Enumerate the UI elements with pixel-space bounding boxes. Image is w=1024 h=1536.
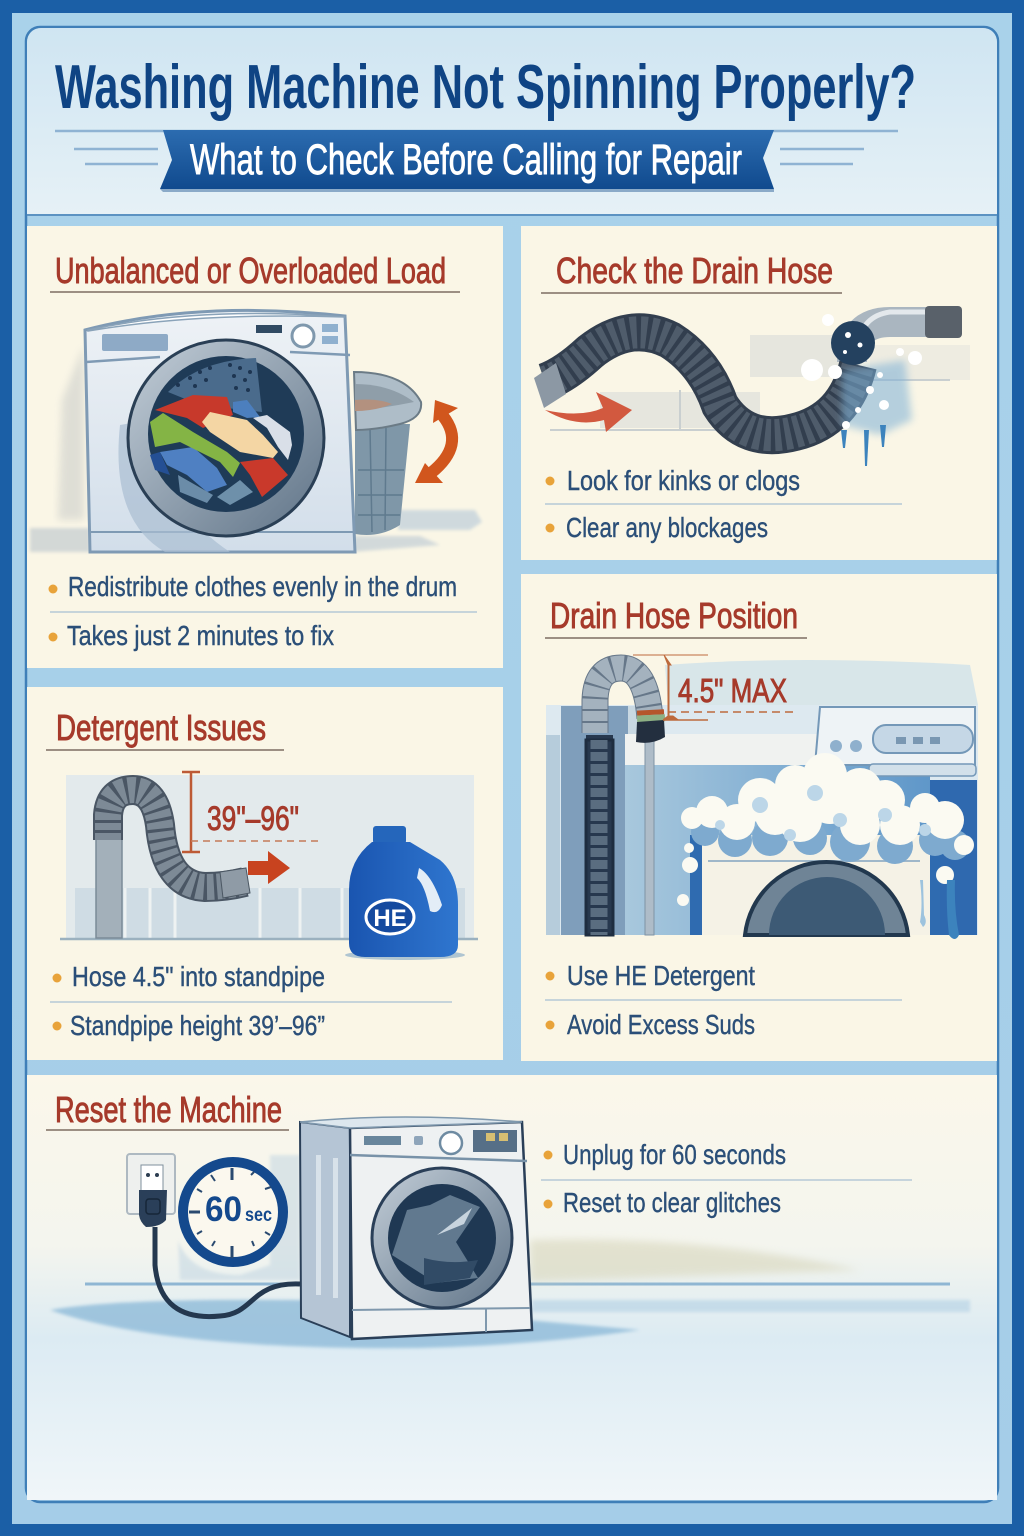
subtitle ribbon: What to Check Before Calling for Repair [190, 136, 742, 184]
measurement: 39 to 96 inches: 39"–96" [207, 800, 299, 838]
hose [108, 790, 245, 887]
bullets: Reset to clear glitches [563, 1187, 781, 1218]
header panel [27, 28, 997, 215]
washer body [85, 310, 355, 552]
backdrop [66, 775, 474, 938]
bullets: Use HE Detergent [567, 960, 755, 991]
laundry basket [354, 372, 421, 535]
suds [677, 753, 974, 939]
icon: 60 second timer [178, 1155, 300, 1280]
heading: Unbalanced or Overloaded Load [55, 250, 446, 291]
washer drum and door [128, 340, 324, 536]
icon: orange swap arrow [415, 400, 458, 483]
bullets: Hose 4.5" into standpipe [72, 961, 325, 992]
icon: 60 second timer: sec [245, 1205, 272, 1226]
bullets [545, 465, 902, 543]
icon: HE detergent bottle [345, 826, 465, 960]
panel: drain hose position [521, 574, 997, 1061]
illustration: washer with laundry and basket [30, 310, 482, 552]
metal pipe [852, 322, 930, 362]
clothes [150, 395, 292, 505]
bullets: Clear any blockages [566, 512, 768, 543]
machine control panel [815, 707, 976, 776]
heading: Reset the Machine [55, 1089, 282, 1130]
header rule lines [55, 131, 898, 164]
arrow [545, 392, 632, 432]
measurement: 4.5 inch max [633, 655, 798, 720]
floor [50, 1239, 970, 1348]
measurement: 4.5 inch max: 4.5" MAX [678, 672, 787, 709]
bullets: Redistribute clothes evenly in the drum [68, 571, 457, 602]
bullets [48, 571, 477, 651]
bullets: Unplug for 60 seconds [563, 1139, 786, 1170]
measurement: 39 to 96 inches [182, 772, 320, 852]
heading: Check the Drain Hose [556, 250, 833, 291]
heading: Drain Hose Position [550, 595, 798, 636]
bullets: Avoid Excess Suds [567, 1009, 755, 1040]
illustration: hose, standpipe height and HE bottle [60, 772, 478, 960]
hose [545, 332, 858, 435]
scene backdrop [665, 660, 978, 705]
panel: check the drain hose [521, 226, 997, 560]
machine door [372, 1168, 512, 1308]
illustration: kinked hose [534, 306, 970, 466]
bullets: Look for kinks or clogs [567, 465, 800, 496]
bullets [545, 960, 902, 1040]
heading: Detergent Issues [56, 707, 266, 748]
panel: unbalanced or overloaded load [27, 226, 503, 668]
clog and splash [842, 360, 912, 435]
standpipe [96, 838, 122, 938]
icon: HE detergent bottle: HE [373, 905, 407, 932]
standpipe [645, 740, 654, 935]
bullets [541, 1139, 912, 1218]
bullets: Takes just 2 minutes to fix [67, 620, 334, 651]
panel: detergent issues [27, 687, 503, 1060]
wall [600, 335, 970, 428]
icon: 60 second timer: 60 [205, 1190, 242, 1229]
bullets: Standpipe height 39’–96” [70, 1010, 325, 1041]
panel: reset the machine [27, 1075, 997, 1500]
icon: wall outlet and plug [127, 1154, 300, 1317]
illustration: washing machine [300, 1117, 532, 1339]
machine door [745, 862, 908, 935]
bullets [50, 961, 452, 1041]
subtitle ribbon [160, 130, 774, 192]
corrugated hose [586, 668, 665, 935]
arrow [248, 851, 290, 884]
illustration: standpipe and suds [546, 655, 978, 939]
